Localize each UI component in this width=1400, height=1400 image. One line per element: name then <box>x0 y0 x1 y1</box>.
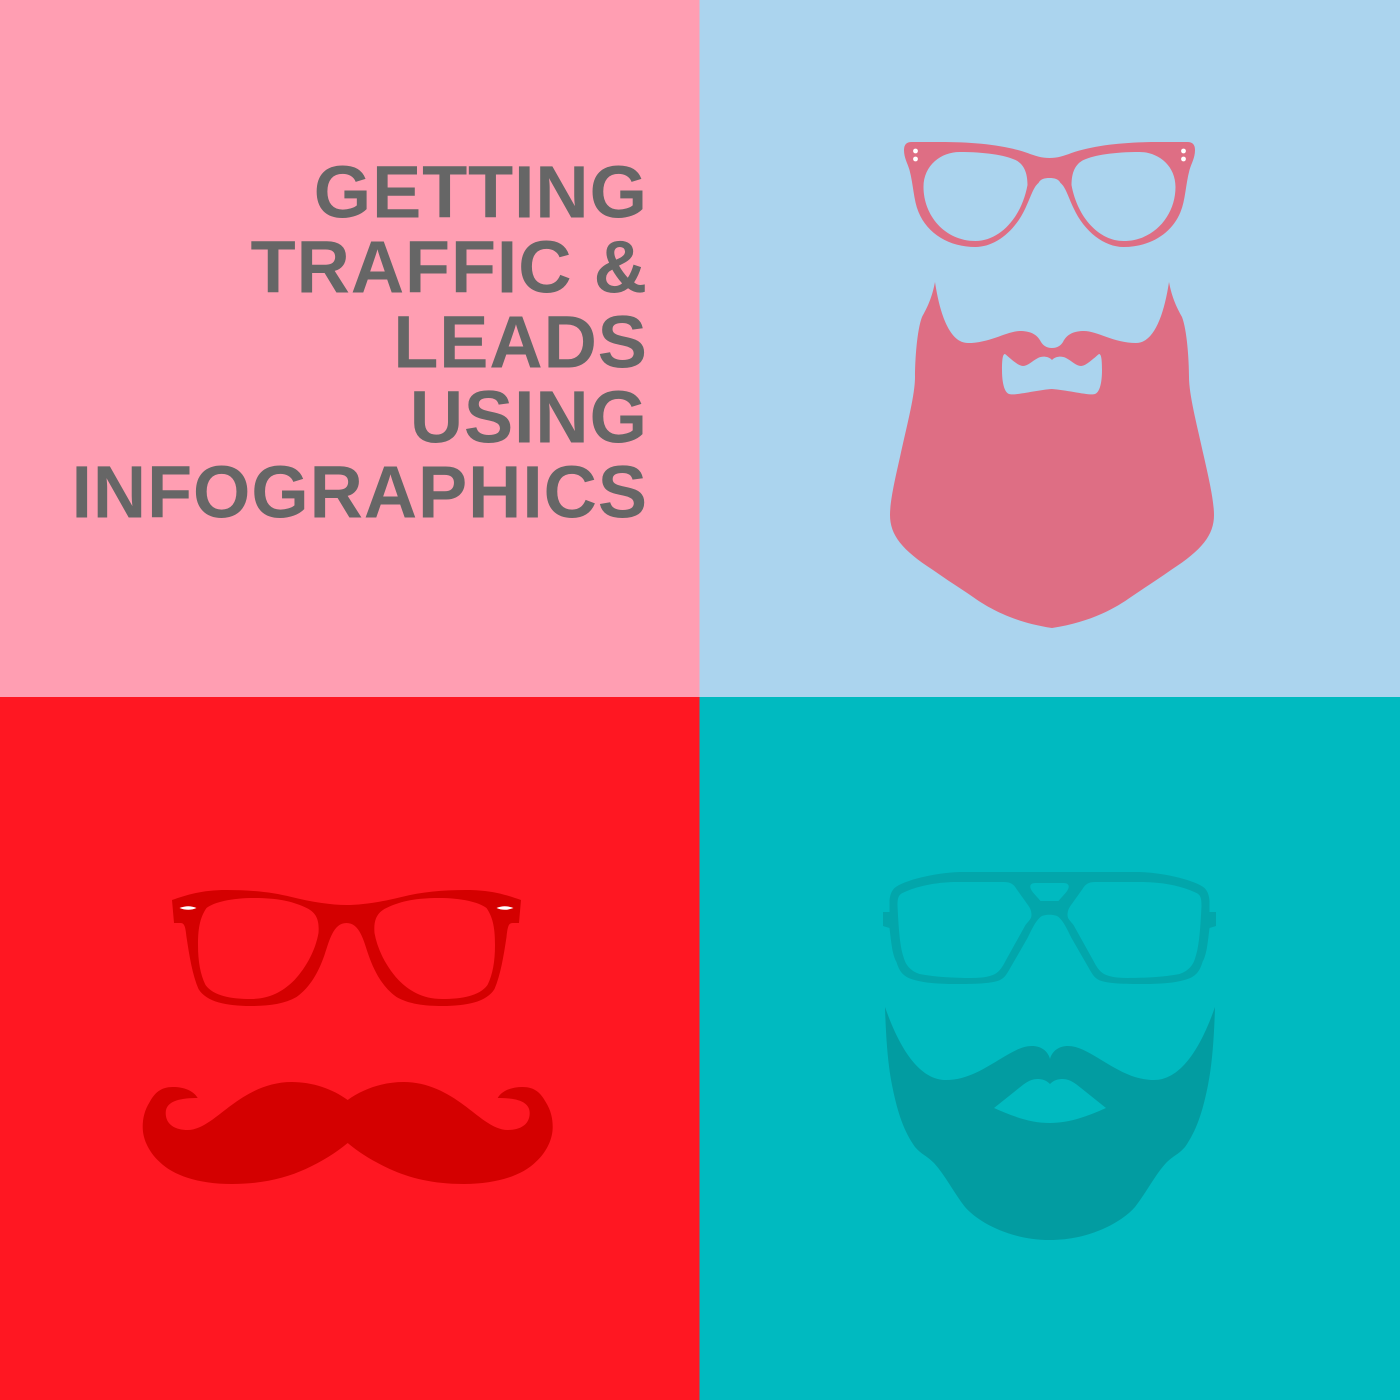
icon: long beard <box>890 282 1214 628</box>
icon: aviator glasses <box>883 872 1216 984</box>
title <box>71 151 648 534</box>
panel: teal with aviator glasses and goatee beard <box>700 697 1400 1400</box>
title: LEADS <box>393 301 648 384</box>
icon: glasses rivets <box>913 149 1186 161</box>
icon: goatee beard <box>885 1007 1215 1240</box>
icon: glasses rivets <box>180 906 514 910</box>
icon: moustache <box>143 1082 553 1184</box>
icon: wayfarer glasses <box>172 890 521 1006</box>
title: GETTING <box>314 151 648 234</box>
panel: title on pink <box>0 0 700 697</box>
title: INFOGRAPHICS <box>71 451 648 534</box>
panel: blue with pink glasses and long beard <box>700 0 1400 697</box>
panel: red with wayfarer glasses and moustache <box>0 697 700 1400</box>
icon: cat-eye glasses <box>904 142 1195 247</box>
title: TRAFFIC & <box>251 226 648 309</box>
title: USING <box>410 376 648 459</box>
